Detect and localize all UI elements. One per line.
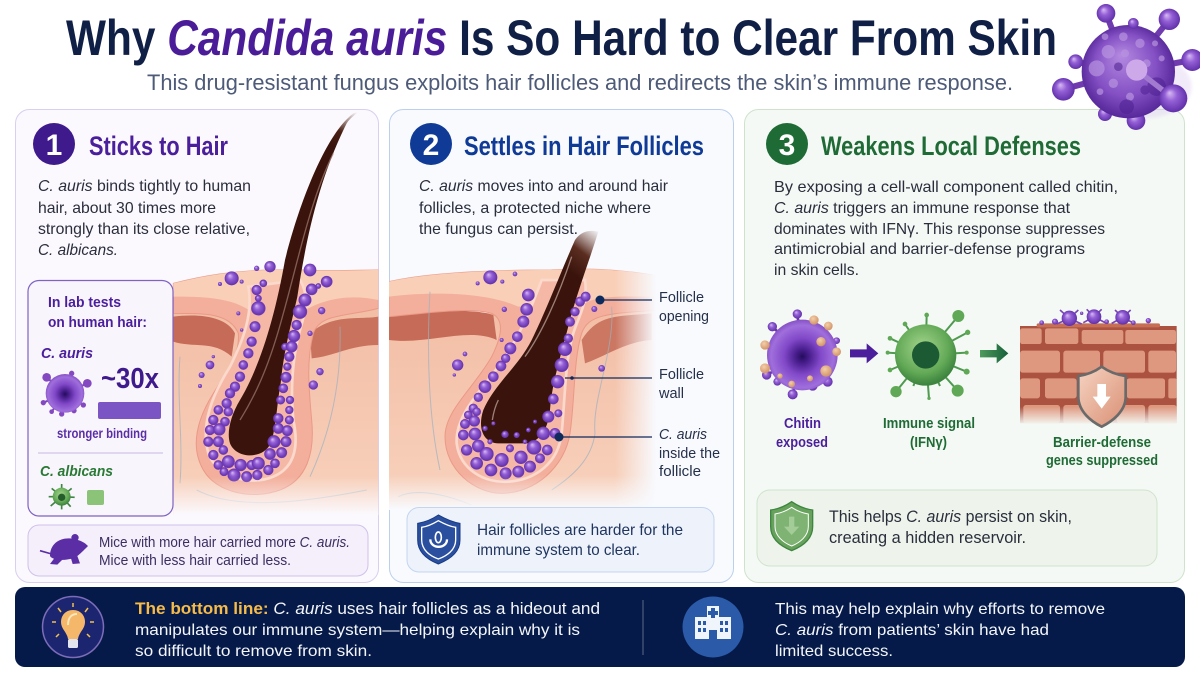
- icon: C. auris cell: [41, 371, 92, 417]
- body text: C. auris binds tightly to human: [38, 178, 251, 195]
- subtitle: This drug-resistant fungus exploits hair follicles and redirects the skin’s immune response.: [147, 70, 1013, 95]
- label: C. auris inside follicle: follicle: [659, 464, 701, 480]
- label: chitin exposed: Chitin: [784, 416, 821, 432]
- text: patient implication: This may help explain why efforts to remove: [775, 601, 1105, 618]
- heading badge 1: 1: [46, 129, 62, 162]
- body text: [774, 179, 1118, 279]
- text: the bottom line: The bottom line: C. auris uses hair follicles as a hideout and: [135, 599, 600, 618]
- callout: lab tests: stronger binding: [57, 426, 147, 441]
- body text: in skin cells.: [774, 262, 859, 279]
- body text: C. auris moves into and around hair: [419, 178, 669, 195]
- text: the bottom line: [135, 599, 600, 660]
- skin surface and dermis colonies: [452, 270, 605, 377]
- text: patient implication: C. auris from patients’ skin have had: [775, 622, 1049, 639]
- body text: dominates with IFNγ. This response suppresses: [774, 221, 1105, 238]
- icon: blue shield: [418, 515, 460, 564]
- icon: lightbulb: [42, 596, 104, 658]
- body text: C. auris triggers an immune response that: [774, 200, 1071, 217]
- text: patient implication: [775, 601, 1105, 660]
- heading badge 1: [33, 123, 75, 165]
- text: patient implication: limited success.: [775, 643, 893, 660]
- callout: lab tests: C. auris: [41, 345, 93, 362]
- icon: mouse: [40, 534, 88, 565]
- heading: Sticks to Hair: [89, 131, 228, 161]
- diagram: pathway: [760, 309, 1178, 469]
- label: immune signal: (IFNγ): [910, 435, 947, 451]
- panel: weakens local defenses: [744, 110, 1184, 582]
- arrow: [850, 343, 878, 363]
- panel: sticks to hair: [16, 110, 380, 582]
- label: follicle wall: wall: [658, 386, 684, 402]
- body text: strongly than its close relative,: [38, 221, 250, 238]
- heading badge 3: [766, 123, 808, 165]
- label: C. auris inside follicle: C. auris: [659, 427, 707, 443]
- C. auris cells inside follicle: [458, 289, 590, 479]
- panel: bottom line banner: [15, 587, 1185, 667]
- label: immune signal: [883, 416, 975, 451]
- heading badge 3: 3: [779, 129, 795, 162]
- label: chitin exposed: [776, 416, 828, 451]
- skin surface colonies: [198, 261, 325, 390]
- icon: green shield: [771, 502, 813, 551]
- icon: hospital: [682, 596, 744, 658]
- heading: Weakens Local Defenses: [821, 131, 1081, 161]
- callout: lab tests: [28, 280, 173, 516]
- heading badge 2: [410, 123, 452, 165]
- body text: [419, 178, 669, 238]
- body text: C. albicans.: [38, 242, 118, 259]
- text: the bottom line: manipulates our immune system—helping explain why it is: [135, 622, 580, 639]
- body text: follicles, a protected niche where: [419, 200, 651, 217]
- body text: antimicrobial and barrier-defense programs: [774, 241, 1085, 258]
- label: C. auris inside follicle: [554, 427, 720, 480]
- illustration: follicle cross-section: [389, 231, 666, 510]
- icon: immune cell: [886, 310, 970, 400]
- callout: hidden reservoir: [757, 490, 1157, 566]
- bar: C. auris binding: [98, 402, 161, 419]
- label: follicle opening: [596, 290, 709, 325]
- arrow: [980, 343, 1008, 363]
- icon: chitin exposed cell: [760, 309, 841, 399]
- label: follicle opening: Follicle: [659, 290, 704, 306]
- body text: [38, 178, 251, 259]
- text: the bottom line: so difficult to remove from skin.: [135, 643, 372, 660]
- label: barrier-defense genes suppressed: [1046, 435, 1158, 469]
- body text: By exposing a cell-wall component called chitin,: [774, 179, 1118, 196]
- C. auris cells along the follicle: [204, 276, 332, 482]
- label: chitin exposed: exposed: [776, 435, 828, 451]
- label: barrier-defense genes suppressed: genes suppressed: [1046, 453, 1158, 469]
- label: follicle opening: opening: [659, 309, 709, 325]
- callout: mice: Mice with less hair carried less.: [99, 553, 291, 569]
- callout: lab tests: on human hair:: [48, 314, 147, 331]
- label: follicle wall: Follicle: [659, 367, 704, 383]
- bar: C. albicans binding: [87, 490, 104, 505]
- heading badge 2: 2: [423, 129, 439, 162]
- icon: C. albicans cell: [49, 484, 75, 509]
- illustration: hair in follicle with C. auris: [173, 112, 380, 515]
- body text: the fungus can persist.: [419, 221, 578, 238]
- label: immune signal: Immune signal: [883, 416, 975, 432]
- callout: mice: Mice with more hair carried more C. auris.: [99, 535, 350, 551]
- body text: hair, about 30 times more: [38, 200, 216, 217]
- callout: hidden reservoir: creating a hidden reservoir.: [829, 529, 1026, 547]
- callout: lab tests: ~30x: [101, 363, 159, 395]
- label: follicle wall: [565, 367, 704, 402]
- callout: immune system: immune system to clear.: [477, 542, 640, 559]
- callout: immune system: [407, 508, 714, 572]
- panel: settles in hair follicles: [389, 110, 734, 582]
- callout: mice: [28, 525, 368, 576]
- callout: lab tests: In lab tests: [48, 294, 121, 311]
- label: C. auris inside follicle: inside the: [659, 446, 720, 462]
- heading: Settles in Hair Follicles: [464, 131, 704, 161]
- title: Why Candida auris Is So Hard to Clear From Skin: [66, 10, 1057, 66]
- icon: virus illustration: [1052, 4, 1200, 130]
- label: barrier-defense genes suppressed: Barrier-defense: [1053, 435, 1151, 451]
- icon: brick barrier with shield: [1018, 309, 1178, 427]
- callout: hidden reservoir: This helps C. auris persist on skin,: [829, 508, 1072, 526]
- callout: immune system: Hair follicles are harder for the: [477, 522, 683, 539]
- callout: lab tests: C. albicans: [40, 463, 113, 480]
